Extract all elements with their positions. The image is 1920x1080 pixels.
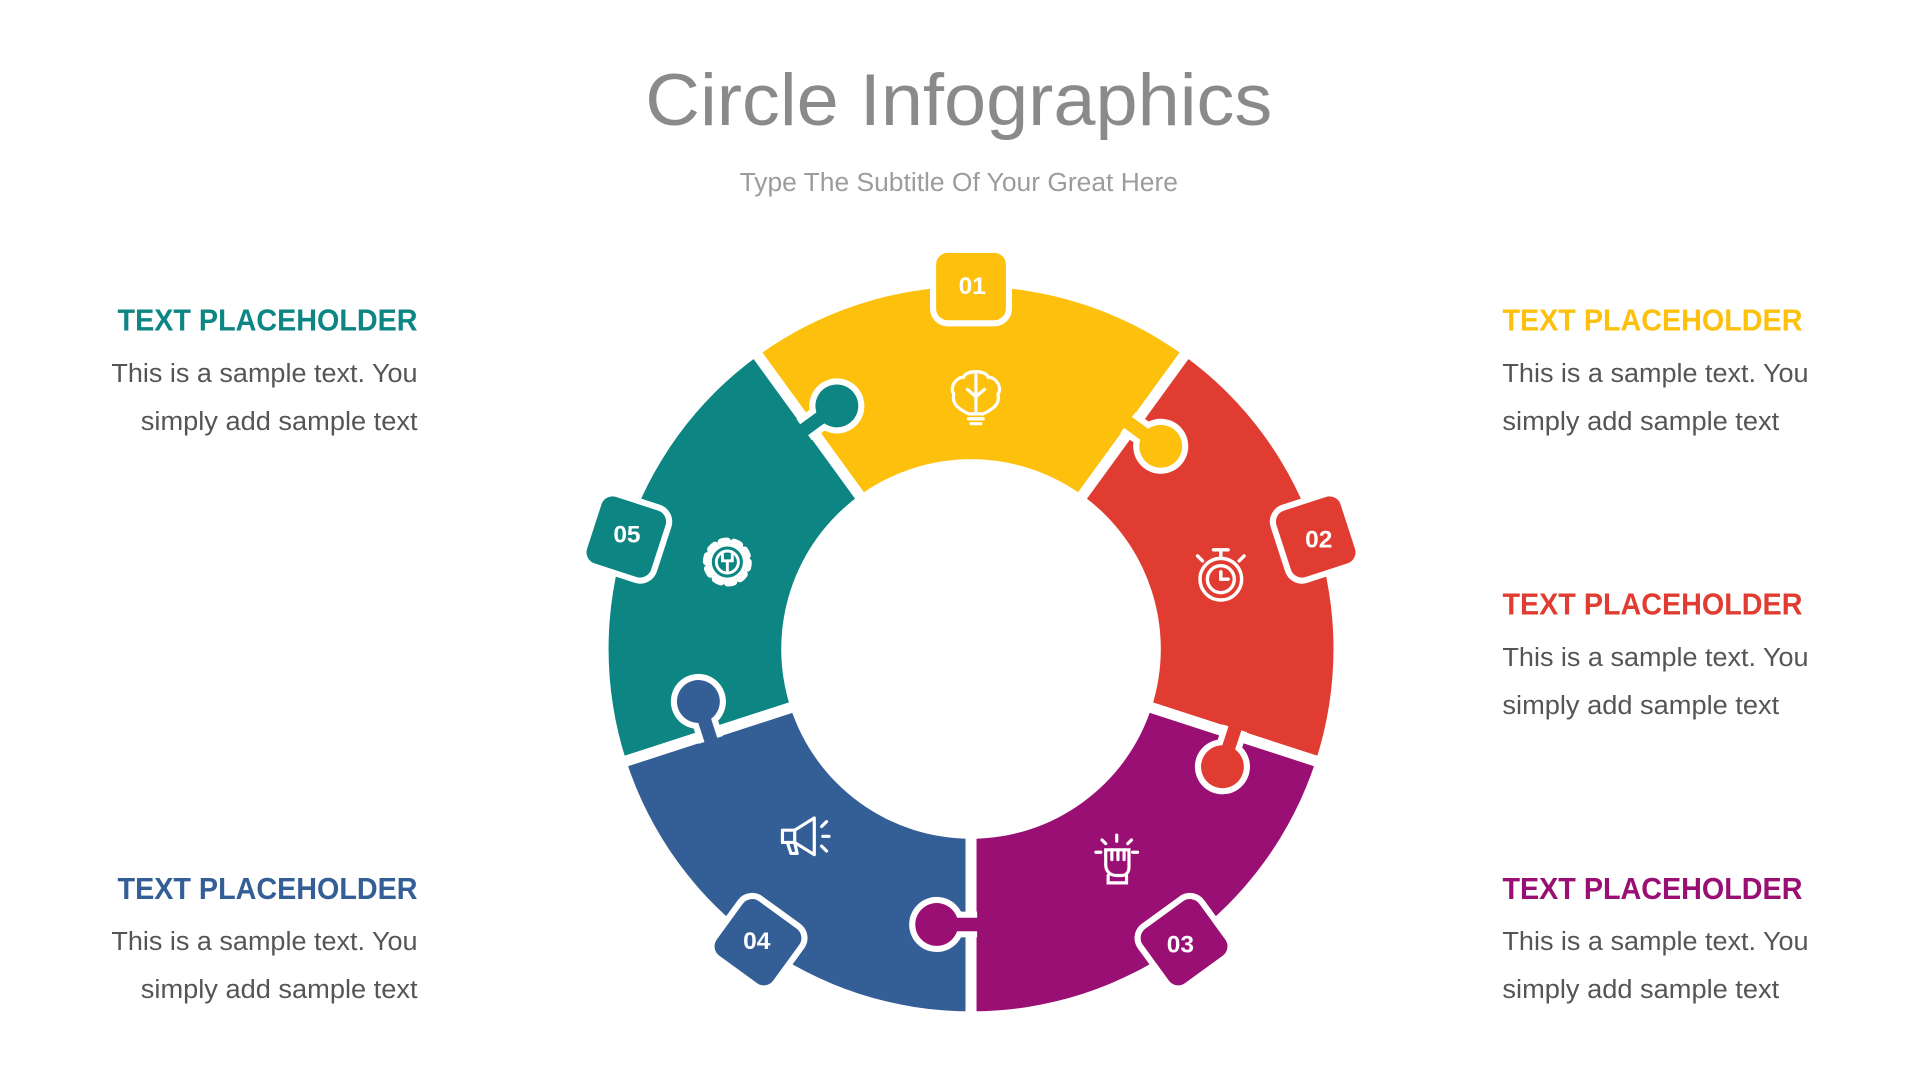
text block: teal top-left: This is a sample text. You [111,360,418,388]
text block: teal top-left: TEXT PLACEHOLDER [118,304,418,338]
number tab 01: 01 [959,273,986,300]
number tab 04: 04 [743,928,771,955]
text block: yellow top-right [1502,304,1809,436]
text block: purple bottom-right: TEXT PLACEHOLDER [1502,872,1802,906]
text block: red middle-right: This is a sample text. You [1502,644,1809,672]
subtitle: Type The Subtitle Of Your Great Here [740,169,1178,197]
knob: red into purple [1192,721,1258,798]
text block: yellow top-right: This is a sample text. You [1502,360,1809,388]
number tab 02: 02 [1305,526,1332,553]
number tab 02 [1269,490,1362,584]
text block: purple bottom-right: simply add sample text [1502,976,1779,1004]
text block: yellow top-right: TEXT PLACEHOLDER [1502,304,1802,338]
knob: yellow into red [1114,403,1195,480]
text block: red middle-right [1502,588,1809,720]
number tab 01 [933,250,1009,323]
number tab 05 [580,490,673,584]
text block: blue bottom-left: This is a sample text. You [111,928,418,956]
icon: raised fist [1096,835,1138,883]
text block: red middle-right: simply add sample text [1502,692,1779,720]
text block: blue bottom-left [111,872,418,1004]
icon: megaphone [782,818,829,855]
text block: teal top-left [111,304,418,436]
text block: purple bottom-right: This is a sample text. You [1502,928,1809,956]
segment: purple 03 [971,708,1316,1011]
number tab 03: 03 [1167,932,1194,959]
text block: blue bottom-left: simply add sample text [141,976,418,1004]
text block: teal top-left: simply add sample text [141,408,418,436]
knob: teal into yellow [790,372,871,449]
segment: blue 04 [626,708,971,1011]
segment: yellow 01 [758,286,1184,495]
puzzle ring chart [580,250,1362,1029]
number tab 04 [706,890,810,994]
text block: blue bottom-left: TEXT PLACEHOLDER [118,872,418,906]
text block: purple bottom-right [1502,872,1809,1004]
knob: blue into teal [668,671,734,748]
number tab 03 [1132,890,1236,994]
text block: yellow top-right: simply add sample text [1502,408,1779,436]
segment: teal 05 [609,356,859,761]
number tab 05: 05 [613,521,641,548]
title: Circle Infographics [645,58,1272,141]
icon: brain bulb [952,372,1000,424]
icon: gear wrench [707,541,748,583]
text block: red middle-right: TEXT PLACEHOLDER [1502,588,1802,622]
segment: red 02 [1083,356,1333,761]
icon: stopwatch [1198,550,1244,600]
knob: purple into blue [912,900,977,949]
